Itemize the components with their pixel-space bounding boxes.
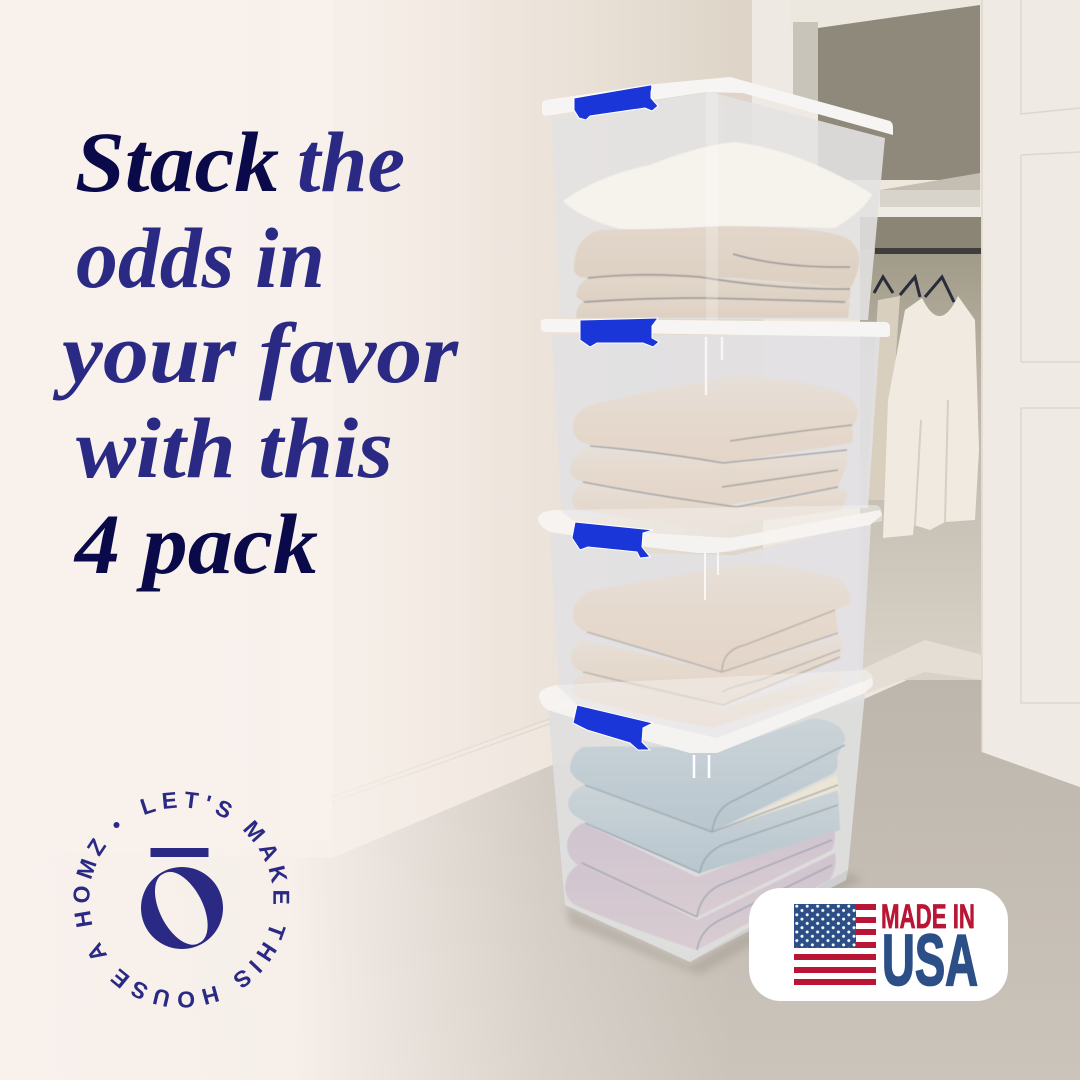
latch: bin 2: [580, 318, 659, 347]
headline: with this: [76, 400, 393, 496]
bin stack: [538, 77, 893, 975]
bin 2 body: [552, 335, 880, 518]
headline: your favor: [52, 305, 460, 401]
bin 3 blankets: [571, 563, 850, 728]
door: [982, 0, 1080, 787]
bin 1 lid: [542, 77, 893, 135]
closet lower interior: [860, 217, 981, 680]
circular slogan: LET'S MAKE THIS HOUSE A HOMZ: [73, 792, 290, 1008]
bin 4 blankets: [565, 718, 845, 950]
logo ring mark: [141, 867, 223, 949]
closet shelf: [880, 173, 980, 192]
bin 3 inner rib: [705, 553, 718, 600]
bin 1 blanket: [574, 226, 860, 318]
headline: the: [297, 114, 405, 210]
bin 1 body: [552, 92, 885, 320]
headline: odds in: [76, 210, 325, 306]
separator dot: [114, 822, 120, 828]
closet upper interior: [818, 5, 980, 180]
headline: Stack: [75, 114, 279, 210]
latch: bin 1: [574, 85, 658, 120]
bin 3 body: [550, 522, 871, 745]
bin 2 inner rib: [706, 337, 722, 395]
closet pillar: [752, 0, 818, 300]
closet lintel: [790, 0, 982, 28]
flag: [794, 904, 876, 985]
headline: [52, 114, 460, 592]
hanging shirts: [866, 277, 979, 538]
bin 1 pillow: [563, 142, 872, 229]
bin 2 blankets: [570, 375, 858, 528]
bin 4 ribs: [694, 755, 709, 778]
bin 4 base: [565, 870, 848, 962]
hanger rod: [875, 248, 981, 254]
made in text: MADE IN: [881, 898, 975, 936]
USA text: USA: [882, 921, 978, 1001]
bin 4 body: [548, 693, 865, 962]
logo badge: [73, 792, 290, 1008]
headline: 4 pack: [73, 496, 318, 592]
logo macron: [150, 848, 208, 857]
made in USA badge: [749, 888, 1008, 1001]
floor: [0, 672, 1080, 1080]
bin 2 lid: [541, 319, 890, 337]
latch: bin 3: [572, 522, 653, 558]
baseboard: [332, 718, 552, 858]
latch: bin 4: [573, 705, 653, 750]
bin 1 corner rib: [706, 92, 718, 320]
bin 3 lid: [538, 505, 882, 553]
floor shadow: [565, 872, 862, 975]
bin 4 lid: [539, 670, 873, 753]
